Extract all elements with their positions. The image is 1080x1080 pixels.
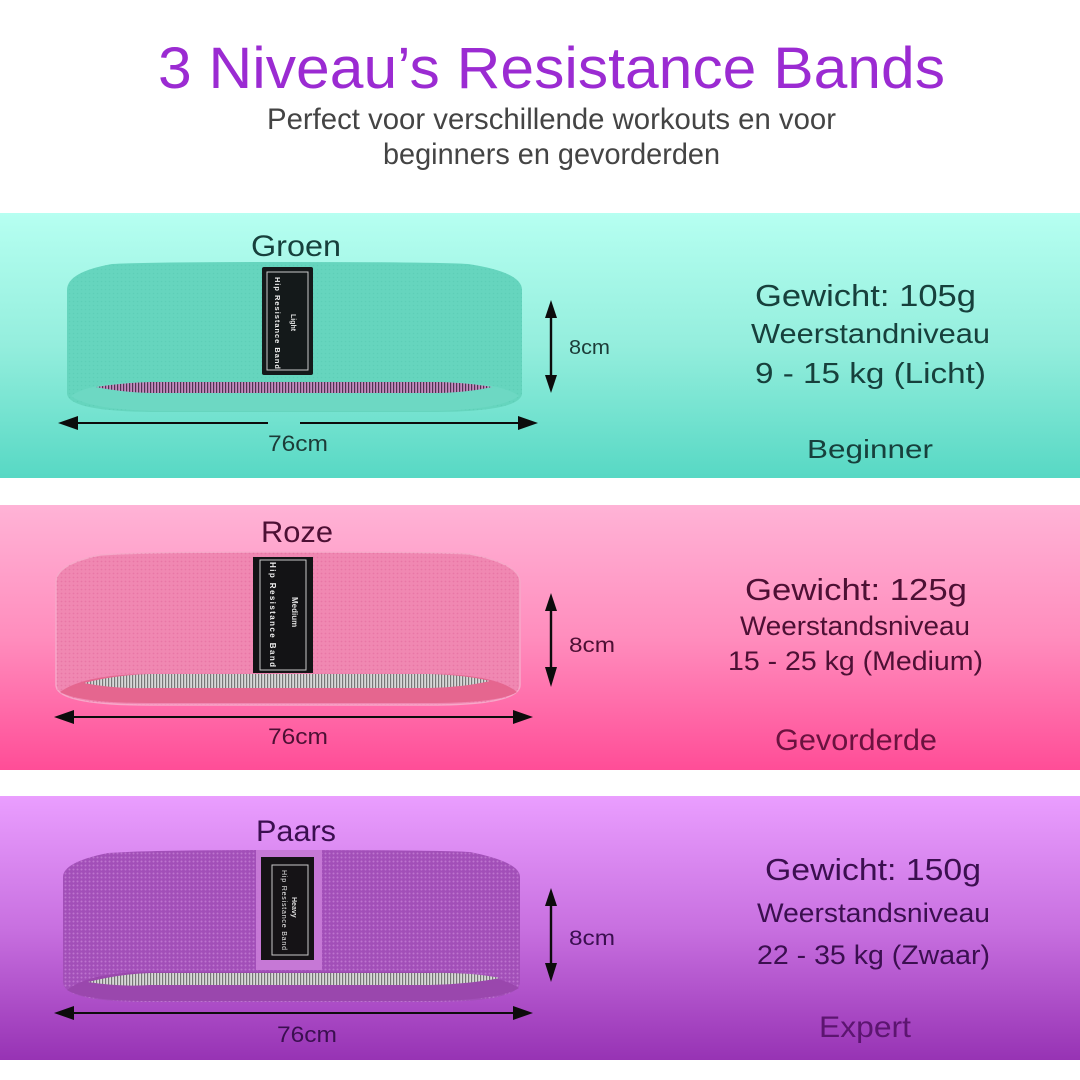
band name: Roze — [261, 516, 333, 549]
band label: Light — [289, 314, 296, 332]
band name: Paars — [256, 815, 336, 848]
width label: 76cm — [268, 431, 328, 456]
subtitle: beginners en gevorderden — [383, 138, 720, 171]
specs — [757, 852, 990, 970]
band image: groen — [67, 262, 522, 412]
width label: 76cm — [277, 1022, 337, 1047]
subtitle — [267, 103, 836, 171]
specs: Weerstandsniveau — [757, 898, 990, 928]
specs — [751, 278, 990, 390]
band image: paars — [63, 850, 520, 1002]
title: 3 Niveau’s Resistance Bands — [158, 36, 945, 101]
specs: 9 - 15 kg (Licht) — [755, 358, 986, 390]
band label — [256, 850, 322, 970]
specs: Gewicht: 150g — [765, 852, 981, 887]
specs: 15 - 25 kg (Medium) — [728, 646, 983, 676]
height label: 8cm — [569, 634, 615, 657]
panel: paars — [0, 796, 1080, 1060]
level: Beginner — [807, 434, 933, 464]
specs: Weerstandsniveau — [740, 611, 970, 641]
width label: 76cm — [268, 724, 328, 749]
panel: roze — [0, 505, 1080, 770]
subtitle: Perfect voor verschillende workouts en voor — [267, 103, 836, 136]
band label: Heavy — [290, 897, 297, 918]
level: Gevorderde — [775, 724, 937, 757]
specs: Gewicht: 105g — [755, 278, 976, 313]
band name: Groen — [251, 230, 341, 263]
band label: Hip Resistance Band — [280, 870, 287, 950]
specs: 22 - 35 kg (Zwaar) — [757, 940, 990, 970]
arrow: height — [545, 300, 557, 393]
arrow: height — [545, 888, 557, 982]
band label — [253, 557, 313, 673]
band label: Hip Resistance Band — [268, 562, 277, 667]
arrow: width — [58, 416, 538, 430]
level: Expert — [819, 1011, 912, 1044]
specs: Weerstandniveau — [751, 318, 990, 349]
height label: 8cm — [569, 927, 615, 950]
specs — [728, 572, 983, 676]
band image: roze — [56, 552, 520, 705]
arrow: width — [54, 1006, 533, 1020]
specs: Gewicht: 125g — [745, 572, 967, 607]
band label — [262, 267, 313, 375]
height label: 8cm — [569, 337, 610, 359]
arrow: width — [54, 710, 533, 724]
band label: Hip Resistance Band — [273, 277, 282, 369]
arrow: height — [545, 593, 557, 687]
panel: groen — [0, 213, 1080, 478]
band label: Medium — [290, 597, 299, 627]
